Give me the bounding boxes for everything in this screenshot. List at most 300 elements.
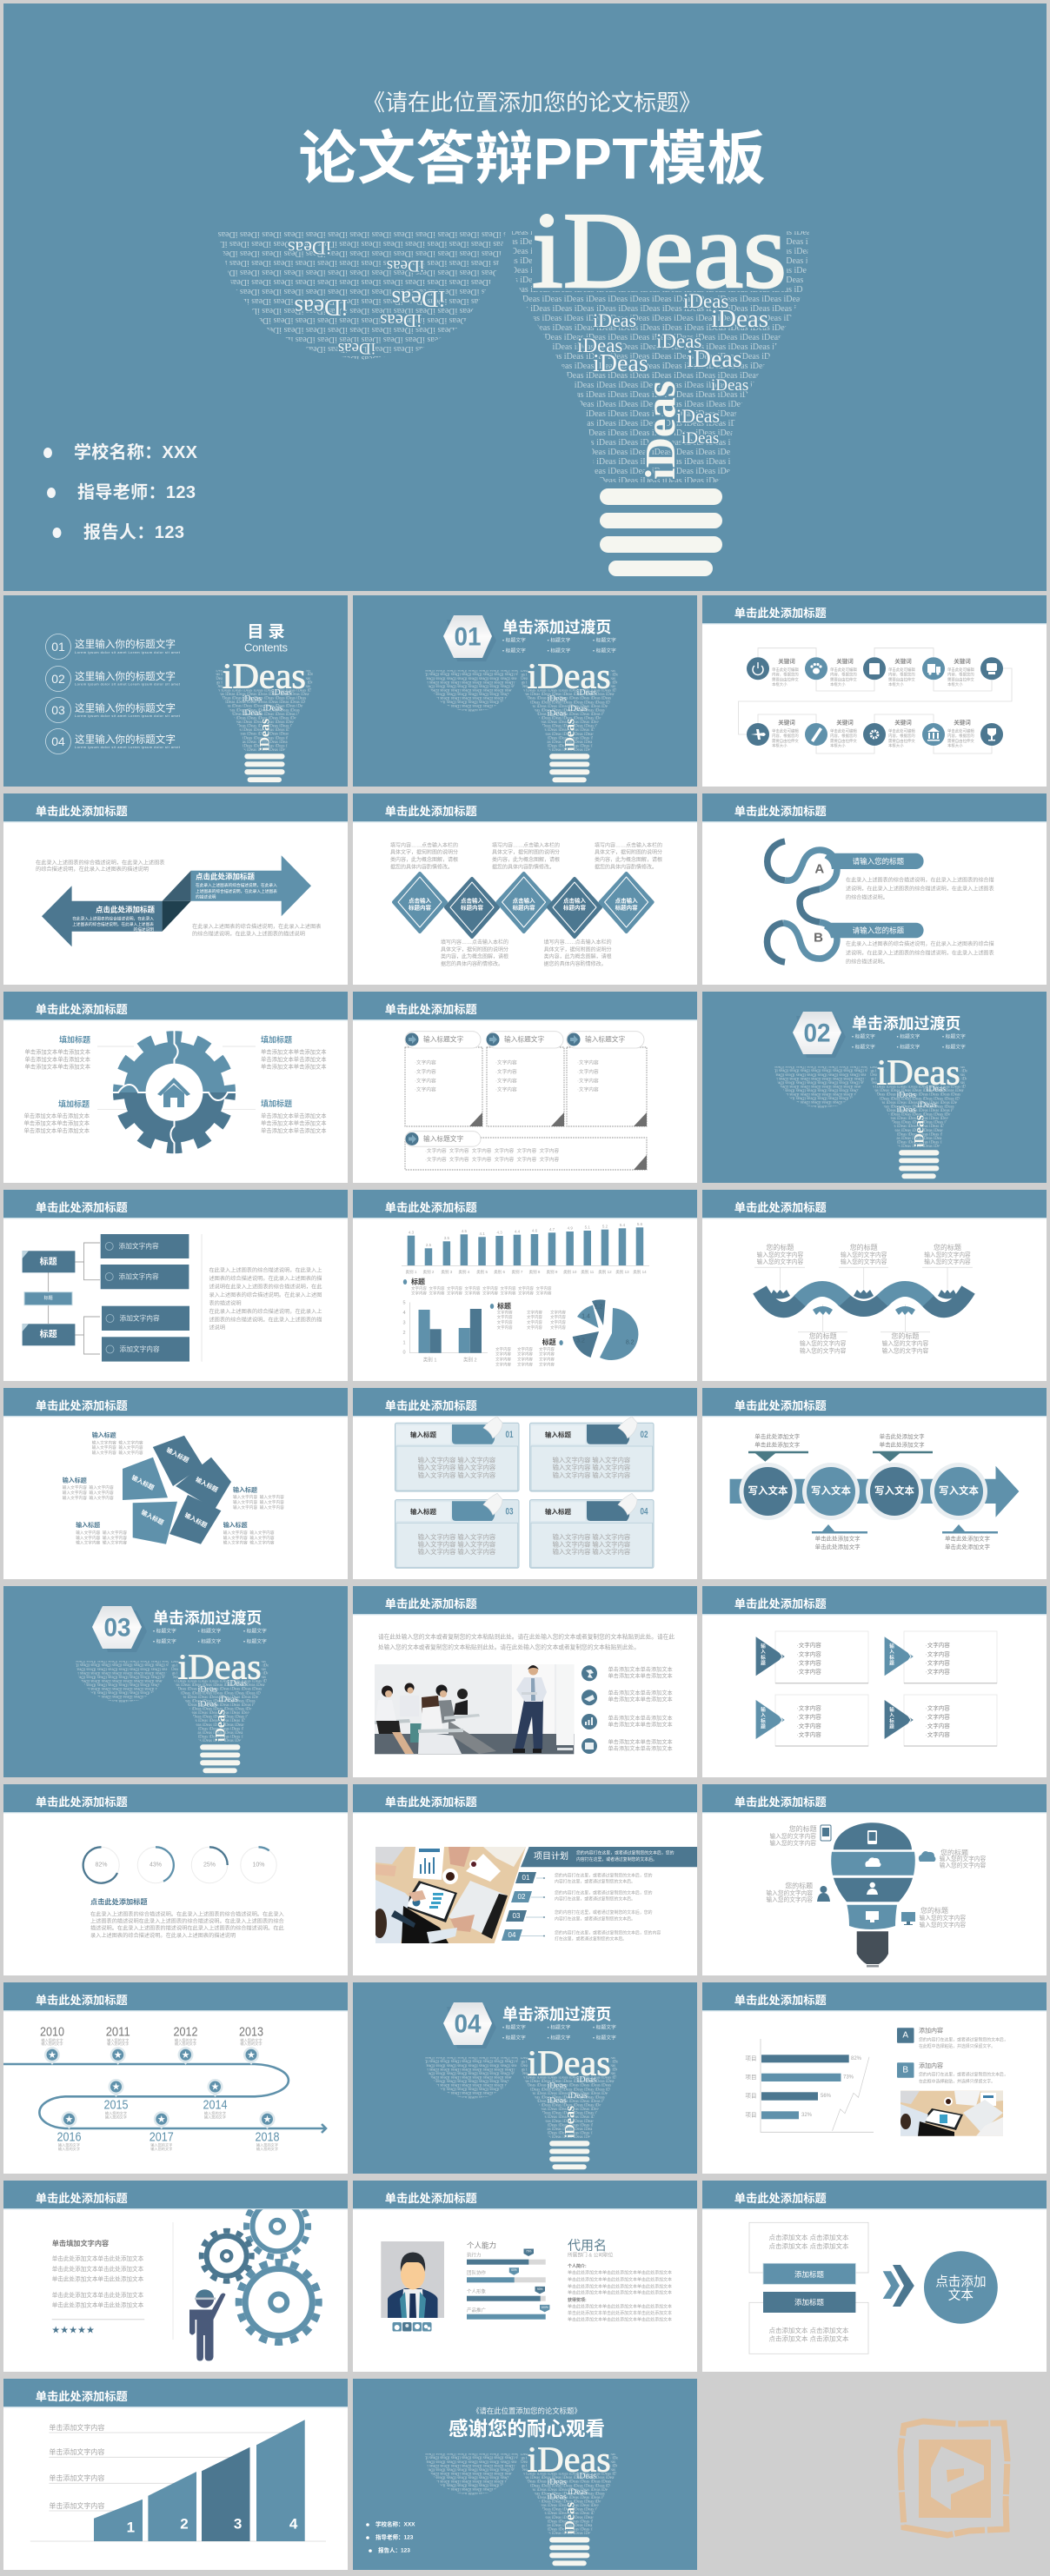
bulb word cloud: iDeas iDeas iDeas iDeas iDeas iDeas iDeas iDeas iDeas <box>425 2055 521 2059</box>
tree description: 表的描述说明 <box>209 1299 242 1306</box>
word cloud bowl: iDeas iDeas iDeas iDeas iDeas iDeas iDeas iDeas iDeas iDeas iDeas iDeas iDeas iDeas <box>208 277 513 287</box>
bulb word cloud: iDeas iDeas iDeas iDeas iDeas iDeas iDeas iDeas iDeas <box>520 2532 615 2536</box>
header: 单击此处添加标题 <box>734 606 827 620</box>
icon: house <box>157 1078 190 1107</box>
column chart: 2 <box>402 1331 406 1336</box>
timeline sub text: 输入您的文字 <box>107 2041 129 2047</box>
pentagon card lists: ·文字内容 <box>926 1730 950 1738</box>
timeline path <box>3 2064 326 2133</box>
pill titles: 输入标题文字 <box>504 1034 544 1043</box>
bulb word cloud: iDeas iDeas iDeas iDeas iDeas iDeas iDeas iDeas iDeas <box>520 733 615 737</box>
slide: thanks <box>353 2379 697 2570</box>
bulb word cloud: iDeas iDeas iDeas iDeas iDeas iDeas iDeas iDeas iDeas <box>425 2491 521 2495</box>
bulb word cloud: iDeas <box>547 2081 567 2091</box>
subtitle: 《请在此位置添加您的论文标题》 <box>362 90 701 116</box>
plan step text: 内容打在这里，或者通过复制您的文本后。 <box>555 1915 635 1922</box>
gear labels: 填加标题 <box>261 1099 292 1108</box>
word cloud bowl: iDeas iDeas iDeas iDeas iDeas iDeas iDeas iDeas iDeas iDeas iDeas iDeas iDeas iDeas iDeas <box>196 229 523 239</box>
box text: 点击添加文本 点击添加文本 <box>768 2241 849 2250</box>
bulb word cloud: iDeas iDeas iDeas iDeas iDeas iDeas iDeas iDeas iDeas <box>774 1079 870 1084</box>
ring description: 在此录入上述图表的综合描述说明。在此录入上述图表的综合描述说明。在此录入 <box>90 1910 284 1917</box>
list text: 单击添加文本单击添加文本 <box>608 1666 673 1673</box>
keyword descriptions: 需要自由拉伸文 <box>947 737 974 743</box>
right arrow text: 上述图表的综合描述说明，在此录入上述图表 <box>196 888 277 893</box>
header: 单击此处添加标题 <box>734 804 827 818</box>
polygon side texts <box>63 1431 284 1545</box>
bulb word cloud: iDeas iDeas iDeas iDeas iDeas iDeas iDeas iDeas iDeas iDeas <box>210 689 317 693</box>
legend two <box>490 1302 566 1331</box>
word cloud bulb: iDeas iDeas iDeas iDeas iDeas iDeas iDeas iDeas iDeas iDeas iDeas iDeas iDeas iDeas iDeas <box>498 256 826 266</box>
bulb word cloud: iDeas iDeas iDeas iDeas iDeas iDeas iDeas iDeas iDeas <box>520 2484 615 2488</box>
bar chart: 类别 7 <box>512 1269 523 1275</box>
slide: contents: 04 <box>51 734 65 748</box>
social icons <box>393 2322 431 2331</box>
legend one <box>403 1278 552 1297</box>
bulb word cloud: iDeas iDeas iDeas iDeas iDeas iDeas iDeas iDeas iDeas <box>520 2135 615 2140</box>
top callouts <box>748 1432 933 1462</box>
bulb word cloud: iDeas iDeas iDeas iDeas iDeas iDeas iDeas iDeas iDeas iDeas <box>515 2488 622 2493</box>
bulb word cloud: iDeas iDeas iDeas iDeas iDeas iDeas iDeas iDeas iDeas <box>520 677 615 681</box>
bulb word cloud: iDeas iDeas iDeas iDeas iDeas iDeas iDeas iDeas iDeas iDeas <box>865 1132 972 1137</box>
tree description: 在此录入上述图表的综合描述说明，在此录入上 <box>209 1266 322 1273</box>
bulb callouts: 您的标题 <box>789 1824 817 1833</box>
keyword descriptions: 内容，根据您的 <box>830 732 857 739</box>
bulb word cloud <box>418 657 622 782</box>
left boxes: 标题 <box>44 1295 53 1301</box>
stair numbers: 2 <box>180 2515 189 2533</box>
slide: rotated cards <box>3 1388 348 1579</box>
header <box>3 1388 348 1417</box>
plan step text: 您的内容打在这里，或者通过复制您的文本后，您的内容 <box>555 1929 661 1935</box>
horizontal bar chart: 项目 <box>746 2055 756 2061</box>
word cloud bowl: iDeas iDeas iDeas iDeas iDeas iDeas iDeas iDeas iDeas iDeas iDeas iDeas iDeas iDeas <box>208 296 513 306</box>
bottom callouts: 单击此处添加文字 <box>815 1535 861 1542</box>
timeline years: 2012 <box>174 2025 198 2039</box>
bulb word cloud: iDeas <box>272 687 291 697</box>
bulb word cloud: iDeas iDeas iDeas iDeas iDeas iDeas iDeas iDeas iDeas <box>774 1096 870 1100</box>
main title: 论文答辩PPT模板 <box>299 127 765 191</box>
bulb word cloud: iDeas iDeas iDeas iDeas iDeas iDeas iDeas iDeas iDeas iDeas <box>515 689 622 694</box>
box lists: ·文字内容 <box>577 1077 599 1084</box>
timeline sub text: 输入您的文字 <box>41 2041 63 2047</box>
pentagon tags: 标 <box>889 1654 894 1661</box>
bulb word cloud: iDeas iDeas iDeas iDeas iDeas iDeas iDeas iDeas iDeas <box>425 675 521 680</box>
diamond labels: 点击输入 <box>409 896 431 904</box>
profile description: 个人简介: <box>568 2263 587 2269</box>
bulb word cloud: iDeas iDeas iDeas iDeas iDeas iDeas iDeas iDeas iDeas iDeas <box>418 680 525 684</box>
bottom callouts: 单击此处添加文字 <box>945 1543 991 1550</box>
keyword descriptions: 需要自由拉伸文 <box>888 676 915 682</box>
box lists: ·文字内容 <box>495 1059 517 1066</box>
stair labels <box>49 2423 104 2510</box>
left text block: 单击此处添加文本单击此处添加文本 <box>52 2275 144 2282</box>
bulb word cloud: iDeas iDeas iDeas iDeas iDeas iDeas iDeas iDeas iDeas <box>425 2070 521 2075</box>
header: 单击此处添加标题 <box>385 1200 477 1214</box>
bulb word cloud: iDeas iDeas iDeas iDeas iDeas iDeas iDeas iDeas iDeas iDeas <box>418 2486 525 2491</box>
profile description: 单击此处添加文本单击此处添加文本单击此处添加文本 <box>568 2304 672 2310</box>
descriptions: 在此录入上述图表的综合描述说明，在此录入上述图表的综合描 <box>846 876 994 883</box>
bulb word cloud: iDeas iDeas iDeas iDeas iDeas iDeas iDeas iDeas iDeas iDeas <box>515 2068 622 2072</box>
bulb word cloud: iDeas iDeas iDeas iDeas iDeas iDeas iDeas iDeas iDeas <box>170 1660 266 1664</box>
bulb word cloud: iDeas iDeas iDeas iDeas iDeas iDeas iDeas iDeas iDeas iDeas <box>515 2464 622 2468</box>
bulb word cloud: iDeas iDeas iDeas iDeas iDeas iDeas iDeas iDeas iDeas iDeas <box>418 2059 525 2063</box>
bulb callouts: 输入您的文字内容 <box>767 1895 813 1903</box>
card 03: 输入文字内容 输入文字内容 <box>418 1533 495 1541</box>
list icons <box>581 1665 597 1754</box>
header <box>353 1190 697 1218</box>
horizontal bar chart: 56% <box>821 2094 832 2099</box>
bulb word cloud: iDeas iDeas iDeas iDeas iDeas iDeas iDeas iDeas iDeas <box>869 1121 965 1125</box>
top descriptions: 类内容，此为概念图解，请根 <box>492 856 560 863</box>
wave leader lines <box>754 1267 973 1332</box>
card 01: 输入文字内容 输入文字内容 <box>418 1457 495 1464</box>
bulb word cloud: iDeas iDeas iDeas iDeas iDeas iDeas iDeas iDeas iDeas <box>869 1105 965 1109</box>
timeline pins: ★ <box>263 2115 271 2123</box>
bottom descriptions <box>441 939 612 967</box>
bar chart: 类别 5 <box>476 1269 488 1275</box>
header pills <box>405 1032 644 1146</box>
bulb word cloud: iDeas <box>213 1710 228 1742</box>
bulb segment icons <box>865 1830 881 1922</box>
bulb word cloud: iDeas <box>568 2487 588 2497</box>
school information list <box>43 442 198 542</box>
card 01: 01 <box>506 1430 513 1440</box>
gear descriptions: 单击添加文本单击添加文本 <box>23 1119 90 1126</box>
timeline sub text: 输入您的文字 <box>175 2041 196 2047</box>
transition bullets <box>153 1628 267 1644</box>
keyword labels: 关键词 <box>894 657 912 665</box>
bar chart: 4.1 <box>479 1232 485 1236</box>
keyword descriptions: 内容，根据您的 <box>888 732 915 739</box>
thanks title: 感谢您的耐心观看 <box>449 2418 605 2440</box>
bulb word cloud: iDeas iDeas iDeas iDeas iDeas iDeas iDeas iDeas iDeas iDeas <box>418 2479 525 2483</box>
hero slide: thesis defense cover: iDeas <box>681 429 719 448</box>
keyword descriptions: 需要自由拉伸文 <box>830 737 857 743</box>
bulb word cloud: iDeas iDeas iDeas iDeas iDeas iDeas iDeas iDeas iDeas <box>76 1690 171 1695</box>
wave top texts: 输入您的文字内容 <box>757 1251 803 1258</box>
diamond labels: 标题内容 <box>563 903 586 911</box>
pentagon card lists: ·文字内容 <box>797 1703 821 1711</box>
bulb word cloud: iDeas iDeas iDeas iDeas iDeas iDeas iDeas iDeas iDeas <box>170 1716 266 1720</box>
slide: four circles on arrow <box>702 1388 1047 1579</box>
timeline pins: ★ <box>247 2050 256 2059</box>
bar chart: 3.5 <box>444 1236 450 1240</box>
transition bullets: • 标题文字 <box>243 1637 267 1644</box>
circle callout: 文本 <box>948 2288 974 2303</box>
bulb word cloud: iDeas <box>577 688 596 697</box>
header: 单击此处添加标题 <box>734 1795 827 1809</box>
wave top texts: 您的标题 <box>891 1331 919 1340</box>
ability bars: 执行力 <box>467 2252 482 2259</box>
bulb word cloud: iDeas iDeas iDeas iDeas iDeas iDeas iDeas iDeas iDeas iDeas <box>515 720 622 725</box>
top descriptions: 具体文字，据何附图的说明分 <box>595 849 662 856</box>
keyword descriptions <box>772 666 974 748</box>
slide: wave <box>702 1190 1047 1381</box>
bar chart: 类别 2 <box>423 1269 435 1275</box>
header <box>3 793 348 822</box>
transition bullets: • 标题文字 <box>593 647 616 654</box>
timeline pins: ★ <box>112 2082 120 2091</box>
tree description: 录入上述图表的综合描述说明。在此录入上述图 <box>209 1291 322 1298</box>
bulb word cloud: iDeas iDeas iDeas iDeas iDeas iDeas iDeas iDeas iDeas <box>520 2468 615 2473</box>
bulb word cloud: iDeas iDeas iDeas iDeas iDeas iDeas iDeas iDeas iDeas <box>215 685 310 689</box>
slide: contents: Lorem ipsum dolor sit amet Lorem ipsum dolor sit amet <box>75 650 181 654</box>
bulb word cloud: iDeas iDeas iDeas iDeas iDeas iDeas iDeas iDeas iDeas iDeas <box>515 2496 622 2500</box>
circle callout <box>924 2251 998 2324</box>
profile description: 单击此处添加文本单击此处添加文本单击此处添加文本 <box>568 2270 672 2276</box>
bottom callouts: 单击此处添加文字 <box>945 1535 991 1542</box>
card 03: 输入文字内容 输入文字内容 <box>418 1540 495 1549</box>
wave top texts <box>757 1243 971 1354</box>
bulb word cloud: iDeas iDeas iDeas iDeas iDeas iDeas iDeas iDeas iDeas <box>170 1739 266 1743</box>
header: 单击此处添加标题 <box>385 1795 477 1809</box>
keyword descriptions: 本框大小 <box>947 742 963 748</box>
header <box>3 1982 348 2011</box>
bulb word cloud: iDeas <box>912 1115 927 1147</box>
A legend: A <box>902 2030 908 2041</box>
bulb word cloud: iDeas iDeas iDeas iDeas iDeas iDeas iDeas iDeas iDeas iDeas <box>418 695 525 700</box>
bottom descriptions: 类内容，此为概念图解，请根 <box>441 953 508 960</box>
polygon side texts: 输入文字内容 输入文字内容 <box>92 1444 143 1451</box>
box lists: ·文字内容 <box>415 1068 436 1075</box>
bulb word cloud: iDeas iDeas iDeas iDeas iDeas iDeas iDeas iDeas iDeas iDeas <box>210 681 317 685</box>
bulb word cloud: iDeas iDeas iDeas iDeas iDeas iDeas iDeas iDeas iDeas <box>520 2104 615 2108</box>
word cloud bulb: iDeas iDeas iDeas iDeas iDeas iDeas iDeas iDeas iDeas iDeas iDeas iDeas iDeas iDeas iDeas <box>498 314 826 323</box>
slide: transition 01 <box>353 595 697 787</box>
slide: icon process flow <box>702 595 1047 787</box>
bulb side icons <box>817 1825 935 1925</box>
bulb word cloud: iDeas iDeas iDeas iDeas iDeas iDeas iDeas iDeas iDeas iDeas <box>515 2527 622 2532</box>
column chart: 0 <box>402 1351 406 1356</box>
profile name: 代用名 <box>568 2239 607 2253</box>
gear labels: 填加标题 <box>261 1035 292 1045</box>
A pill <box>824 853 924 869</box>
divider <box>172 2222 174 2340</box>
bulb word cloud: iDeas iDeas iDeas iDeas iDeas iDeas iDeas iDeas iDeas iDeas <box>515 2060 622 2064</box>
bulb word cloud: iDeas iDeas iDeas iDeas iDeas iDeas iDeas iDeas iDeas iDeas <box>69 1686 176 1690</box>
header: 单击此处添加标题 <box>385 1002 477 1016</box>
slide: contents: Lorem ipsum dolor sit amet Lorem ipsum dolor sit amet <box>75 714 181 718</box>
bulb word cloud: iDeas <box>917 1100 937 1110</box>
list text: 单击添加文本单击添加文本 <box>608 1690 673 1696</box>
transition heading: 单击添加过渡页 <box>852 1015 960 1032</box>
box lists: ·文字内容 <box>577 1059 599 1066</box>
icon: stamp logo <box>900 2421 1007 2535</box>
legend two: 文字内容 <box>550 1325 566 1331</box>
left arrow text: 上述图表的综合描述说明，在此录入上述图表 <box>72 921 154 926</box>
bulb word cloud: iDeas iDeas iDeas iDeas iDeas iDeas iDeas iDeas iDeas <box>215 748 310 753</box>
bulb word cloud: iDeas iDeas iDeas iDeas iDeas iDeas iDeas iDeas iDeas <box>520 2453 615 2457</box>
word cloud bowl: iDeas iDeas iDeas iDeas iDeas iDeas iDeas iDeas iDeas iDeas iDeas iDeas iDeas iDeas iDeas <box>196 268 523 277</box>
bulb word cloud: iDeas iDeas iDeas iDeas iDeas iDeas iDeas iDeas iDeas <box>520 2088 615 2092</box>
legend three: 文字内容 <box>495 1346 511 1352</box>
keyword descriptions: 单击此处可编辑 <box>888 727 915 734</box>
left text block <box>52 2239 144 2334</box>
word cloud bulb: iDeas iDeas iDeas iDeas iDeas iDeas iDeas iDeas iDeas iDeas iDeas iDeas iDeas iDeas iDeas <box>498 371 826 381</box>
header <box>3 1784 348 1813</box>
diamond labels: 标题内容 <box>409 903 431 911</box>
box lists: ·文字内容 <box>495 1086 517 1092</box>
word cloud bowl: iDeas iDeas iDeas iDeas iDeas iDeas iDeas iDeas iDeas iDeas iDeas iDeas iDeas iDeas iDeas <box>196 325 523 335</box>
bulb word cloud: iDeas <box>528 657 611 696</box>
ring charts <box>83 1847 276 1883</box>
bulb word cloud: iDeas iDeas iDeas iDeas iDeas iDeas iDeas iDeas iDeas iDeas <box>69 1670 176 1675</box>
keyword descriptions: 单击此处可编辑 <box>830 666 857 673</box>
polygon side texts: 输入文字内容 输入文字内容 <box>223 1535 275 1541</box>
profile name <box>568 2239 614 2259</box>
gear descriptions: 单击添加文本单击添加文本 <box>261 1111 327 1119</box>
hexagon badge 01 <box>443 615 496 661</box>
pie chart <box>573 1299 638 1360</box>
vertical iDeas word: iDeas <box>636 381 684 480</box>
card 02: 02 <box>640 1430 648 1440</box>
horizontal bar chart: 项目 <box>746 2111 756 2118</box>
bottom callouts: 单击此处添加文字 <box>815 1543 861 1550</box>
bar chart: 4.9 <box>568 1225 573 1231</box>
bottom descriptions: 具体文字，据何附图的说明分 <box>441 946 508 953</box>
slide: segmented bulb <box>702 1784 1047 1975</box>
bulb word cloud: iDeas <box>243 708 262 718</box>
hero slide: thesis defense cover: iDeas <box>687 346 742 373</box>
right arrow text: 在此录入上述图表的综合描述说明，在此录入 <box>196 881 277 888</box>
bulb word cloud: iDeas iDeas iDeas iDeas iDeas iDeas iDeas iDeas iDeas iDeas <box>418 672 525 676</box>
top descriptions: 具体文字，据何附图的说明分 <box>492 849 560 856</box>
bulb word cloud: iDeas iDeas iDeas iDeas iDeas iDeas iDeas iDeas iDeas <box>774 1088 870 1092</box>
hero slide: thesis defense cover: iDeas <box>676 405 720 427</box>
gear descriptions: 单击添加文本单击添加文本 <box>24 1062 91 1070</box>
bulb word cloud: iDeas iDeas iDeas iDeas iDeas iDeas iDeas iDeas iDeas <box>215 725 310 729</box>
legend one: 文字内容 文字内容 文字内容 文字内容 文字内容 文字内容 文字内容 文字内容 <box>411 1285 552 1291</box>
bulb word cloud: iDeas iDeas iDeas iDeas iDeas iDeas iDeas iDeas iDeas <box>520 2508 615 2513</box>
word cloud bulb: iDeas iDeas iDeas iDeas iDeas iDeas iDeas iDeas iDeas iDeas iDeas iDeas iDeas iDeas iDeas <box>498 428 826 438</box>
legend two: 文字内容 <box>527 1314 542 1320</box>
pentagon tags: 题 <box>761 1724 766 1730</box>
bulb word cloud: iDeas iDeas iDeas iDeas iDeas iDeas iDeas iDeas iDeas iDeas <box>69 1678 176 1683</box>
pentagon tags: 标 <box>761 1717 766 1724</box>
bulb callouts: 您的标题 <box>785 1881 813 1889</box>
legend three: 文字内容 <box>517 1361 533 1368</box>
bar chart: 类别 8 <box>529 1269 541 1275</box>
hexagon badge 01: 01 <box>454 622 482 652</box>
pentagon tags: 入 <box>889 1712 894 1719</box>
hero slide: thesis defense cover: iDeas <box>295 295 348 321</box>
slide: organisation tree <box>3 1190 348 1381</box>
bulb word cloud: iDeas iDeas iDeas iDeas iDeas iDeas iDeas iDeas iDeas <box>520 685 615 689</box>
word cloud bulb <box>512 231 809 482</box>
bulb word cloud: iDeas iDeas iDeas iDeas iDeas iDeas iDeas iDeas iDeas iDeas <box>418 2075 525 2079</box>
bottom callouts <box>812 1524 998 1550</box>
bulb word cloud: iDeas iDeas iDeas iDeas iDeas iDeas iDeas iDeas iDeas <box>520 2524 615 2528</box>
word cloud bulb: iDeas iDeas iDeas iDeas iDeas iDeas iDeas iDeas iDeas iDeas iDeas iDeas iDeas iDeas <box>508 400 814 409</box>
bulb word cloud: iDeas iDeas iDeas iDeas iDeas iDeas iDeas iDeas iDeas iDeas <box>515 705 622 709</box>
box text: 点击添加文本 点击添加文本 <box>768 2233 849 2241</box>
pill titles <box>423 1034 625 1143</box>
legend three: 文字内容 <box>539 1346 555 1352</box>
card 03: 03 <box>506 1506 513 1517</box>
legend two: 文字内容 <box>497 1319 513 1325</box>
icon: worker <box>189 2289 226 2360</box>
transition bullets: • 标题文字 <box>593 2024 616 2031</box>
header <box>702 1982 1047 2011</box>
description top: 的综合描述说明，在此录入上述图表的描述说明 <box>36 866 149 873</box>
pie chart: 1.4 <box>581 1314 590 1319</box>
guide lines <box>30 2433 326 2541</box>
bulb word cloud: iDeas iDeas iDeas iDeas iDeas iDeas iDeas iDeas iDeas <box>520 2056 615 2061</box>
bulb word cloud: iDeas iDeas iDeas iDeas iDeas iDeas iDeas iDeas iDeas iDeas <box>865 1077 972 1081</box>
transition bullets: • 标题文字 <box>593 2034 616 2041</box>
pie chart: 1.2 <box>595 1304 603 1311</box>
thanks list: 学校名称：XXX <box>375 2520 415 2527</box>
bulb word cloud: iDeas iDeas iDeas iDeas iDeas iDeas iDeas iDeas iDeas iDeas <box>515 744 622 748</box>
bulb word cloud: iDeas <box>927 1085 946 1093</box>
bulb word cloud: iDeas <box>577 2075 596 2084</box>
bulb word cloud: iDeas iDeas iDeas iDeas iDeas iDeas iDeas iDeas iDeas <box>215 733 310 737</box>
gear descriptions: 单击添加文本单击添加文本 <box>23 1126 90 1133</box>
B pill <box>824 923 924 938</box>
bulb word cloud: iDeas <box>243 694 262 704</box>
bar chart: 2.5 <box>426 1243 432 1247</box>
word cloud bulb: iDeas iDeas iDeas iDeas iDeas iDeas iDeas iDeas iDeas iDeas iDeas iDeas iDeas iDeas iDeas <box>498 448 826 457</box>
bulb word cloud: iDeas iDeas iDeas iDeas iDeas iDeas iDeas iDeas iDeas <box>520 748 615 753</box>
box text: 点击添加文本 点击添加文本 <box>768 2326 849 2334</box>
bulb word cloud: iDeas iDeas iDeas iDeas iDeas iDeas iDeas iDeas iDeas iDeas <box>768 1099 874 1104</box>
timeline sub text: 输入您的文字 <box>240 2041 262 2047</box>
bar chart: 类别 14 <box>633 1269 647 1275</box>
transition bullets: • 标题文字 <box>593 637 616 644</box>
hero slide: thesis defense cover: iDeas <box>711 376 748 395</box>
gear descriptions <box>23 1047 327 1133</box>
bulb word cloud: iDeas iDeas iDeas iDeas iDeas iDeas iDeas iDeas iDeas <box>215 708 310 713</box>
slide: diamond chain <box>353 793 697 985</box>
pentagon card lists: ·文字内容 <box>926 1712 950 1720</box>
bulb word cloud: iDeas iDeas iDeas iDeas iDeas iDeas iDeas iDeas iDeas iDeas <box>210 673 317 677</box>
legend three: 文字内容 <box>517 1356 533 1363</box>
slide: personal profile <box>353 2181 697 2372</box>
transition bullets: • 标题文字 <box>502 647 526 654</box>
hexagon badge 04 <box>443 2002 496 2048</box>
hero slide: thesis defense cover: iDeas <box>656 330 701 352</box>
header <box>353 992 697 1020</box>
keyword labels: 关键词 <box>954 718 971 727</box>
bulb word cloud: iDeas iDeas iDeas iDeas iDeas iDeas iDeas iDeas iDeas iDeas <box>865 1125 972 1129</box>
serpentine curve <box>767 841 837 962</box>
bulb word cloud: iDeas iDeas iDeas iDeas iDeas iDeas iDeas iDeas iDeas <box>425 2062 521 2067</box>
connector lines <box>739 648 1012 754</box>
header <box>702 595 1047 624</box>
gear descriptions: 单击添加文本单击添加文本 <box>24 1047 91 1055</box>
card 02: 输入文字内容 输入文字内容 <box>553 1471 630 1479</box>
timeline sub text: 输入您的文字 <box>175 2037 196 2043</box>
title bars: 添加标题 <box>794 2298 824 2307</box>
bulb word cloud: iDeas iDeas iDeas iDeas iDeas iDeas iDeas iDeas iDeas iDeas <box>210 697 317 701</box>
abilities heading: 个人能力 <box>467 2241 496 2249</box>
bottom descriptions: 填写内容……点击输入本栏的 <box>441 939 508 946</box>
polygon labels: 输入标题 <box>165 1446 190 1464</box>
box lists: ·文字内容 <box>495 1068 517 1075</box>
keyword descriptions: 需要自由拉伸文 <box>947 676 974 682</box>
pentagon card lists: ·文字内容 <box>797 1667 821 1675</box>
bulb word cloud: iDeas iDeas iDeas iDeas iDeas iDeas iDeas iDeas iDeas iDeas <box>768 1076 874 1080</box>
bulb word cloud: iDeas iDeas iDeas iDeas iDeas iDeas iDeas iDeas iDeas <box>520 2095 615 2100</box>
slide: project plan <box>353 1784 697 1975</box>
plan step text: 内容打在这里，或者通过复制您的文本后。 <box>555 1878 635 1884</box>
bulb word cloud: iDeas iDeas iDeas iDeas iDeas iDeas iDeas iDeas iDeas <box>520 708 615 713</box>
card 01 <box>395 1417 519 1491</box>
bulb word cloud: iDeas iDeas iDeas iDeas iDeas iDeas iDeas iDeas iDeas iDeas <box>418 2090 525 2095</box>
bar chart: 类别 1 <box>406 1269 417 1275</box>
transition bullets: • 标题文字 <box>153 1637 176 1644</box>
keyword descriptions: 本框大小 <box>888 742 904 748</box>
